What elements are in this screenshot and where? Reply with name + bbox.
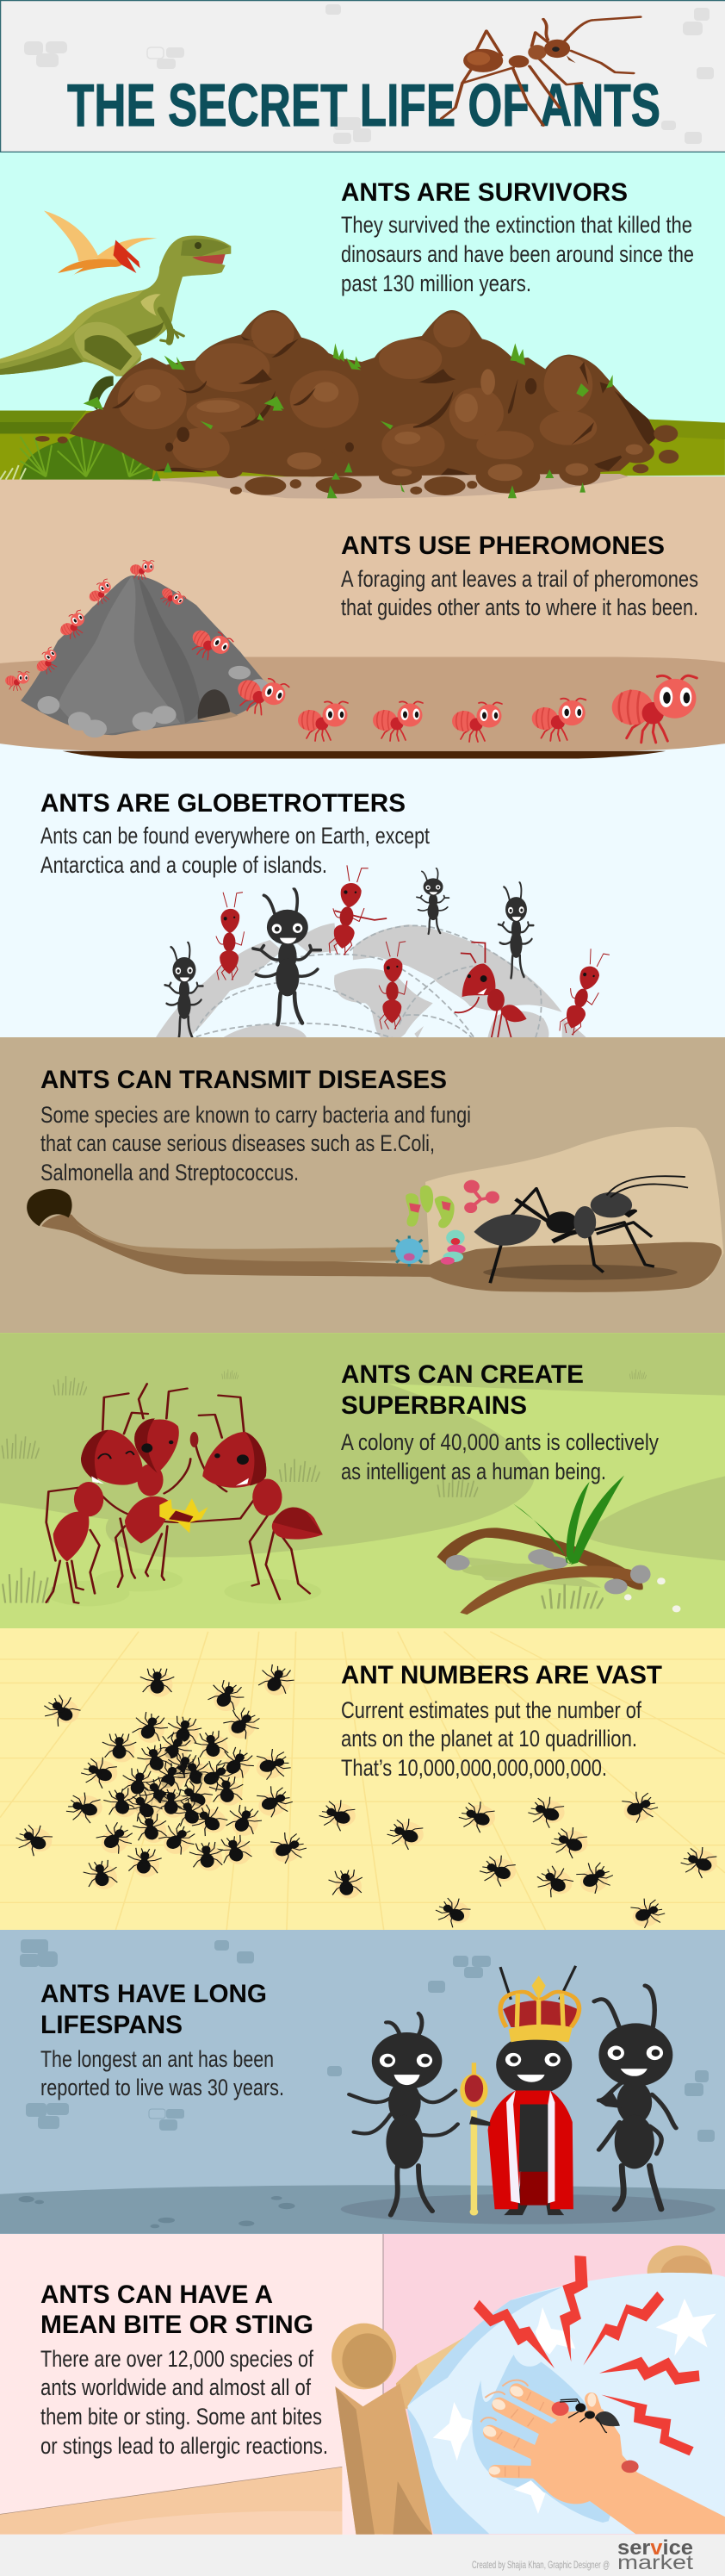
body text	[341, 1429, 659, 1484]
body text: or stings lead to allergic reactions.	[40, 2433, 328, 2459]
heading: ANTS CAN HAVE A	[40, 2280, 273, 2309]
logo: service market: market	[617, 2551, 694, 2573]
panel: ants use pheromones	[0, 476, 725, 758]
grey rock hill	[21, 576, 270, 737]
panel: ants can have a mean bite or sting	[0, 2234, 725, 2535]
body text: Some species are known to carry bacteria and fungi	[40, 1102, 471, 1128]
body text: as intelligent as a human being.	[341, 1459, 606, 1484]
icon: t-rex	[0, 236, 231, 411]
panel: ants can transmit diseases	[0, 1037, 725, 1333]
heading: ANTS CAN TRANSMIT DISEASES	[40, 1066, 447, 1094]
icon: ant mound	[69, 310, 657, 476]
panel: ants can create superbrains	[0, 1333, 725, 1629]
body text: Current estimates put the number of	[341, 1697, 641, 1723]
icon: brown ant on title	[442, 17, 641, 126]
icon: stick and grass	[437, 1475, 680, 1615]
icon: pain lightning bolts	[474, 2256, 700, 2455]
icon: bed with blanket	[396, 2245, 725, 2534]
icon: hand with bites	[480, 2380, 725, 2534]
body text: Antarctica and a couple of islands.	[40, 852, 327, 878]
icon: black ant	[474, 1176, 688, 1283]
body text: There are over 12,000 species of	[40, 2346, 313, 2372]
body text	[341, 212, 694, 296]
panel: ant numbers are vast	[0, 1628, 725, 1932]
body text	[40, 2346, 328, 2459]
footer	[0, 2535, 725, 2576]
red ants trail	[5, 561, 697, 743]
body text: that can cause serious diseases such as E.Coli,	[40, 1130, 435, 1156]
icon: bed post	[332, 2324, 432, 2535]
icon: pterosaur	[44, 211, 158, 277]
icon: three red ants	[46, 1384, 323, 1603]
heading: ANTS USE PHEROMONES	[341, 532, 665, 560]
body text: Ants can be found everywhere on Earth, except	[40, 823, 430, 849]
body text	[40, 2046, 284, 2100]
icon: ferns	[0, 431, 155, 480]
body text	[40, 1102, 471, 1185]
body text: That’s 10,000,000,000,000,000.	[341, 1755, 607, 1781]
icon: left ant	[349, 2013, 458, 2215]
body text: The longest an ant has been	[40, 2046, 274, 2072]
body text	[40, 823, 430, 878]
heading: ANTS ARE SURVIVORS	[341, 178, 628, 207]
body text: ants worldwide and almost all of	[40, 2374, 311, 2400]
tunnel and chamber	[27, 1127, 723, 1292]
icon: right ant	[594, 1986, 676, 2209]
panel: ants are globetrotters	[0, 741, 725, 1049]
heading: MEAN BITE OR STING	[40, 2311, 313, 2339]
ground	[0, 411, 725, 480]
ground	[0, 576, 725, 758]
heading: ANTS CAN CREATE	[341, 1360, 584, 1389]
heading: LIFESPANS	[40, 2011, 183, 2039]
heading: ANTS ARE GLOBETROTTERS	[40, 789, 406, 818]
landscape	[0, 1333, 725, 1606]
heading	[341, 1360, 584, 1420]
floor	[0, 2467, 342, 2535]
heading	[40, 2280, 313, 2339]
logo: service market	[617, 2536, 694, 2573]
heading: ANT NUMBERS ARE VAST	[341, 1661, 662, 1689]
swarm of ants	[11, 1663, 722, 1932]
floor	[0, 2185, 725, 2234]
icon: king ant with crown and scepter	[460, 1966, 579, 2216]
heading	[40, 1980, 267, 2039]
rocks below mound	[115, 425, 679, 499]
body text: A colony of 40,000 ants is collectively	[341, 1429, 659, 1455]
body text	[341, 1697, 641, 1781]
body text: them bite or sting. Some ant bites	[40, 2404, 322, 2430]
body text: past 130 million years.	[341, 271, 531, 296]
body text: ants on the planet at 10 quadrillion.	[341, 1726, 637, 1752]
heading: ANTS HAVE LONG	[40, 1980, 267, 2008]
body text: Salmonella and Streptococcus.	[40, 1160, 299, 1185]
icon: germs	[391, 1180, 499, 1266]
grass tufts	[2, 1369, 647, 1608]
logo: service market: service	[617, 2536, 693, 2560]
panel: ants are survivors	[0, 152, 725, 499]
panel: ants have long lifespans	[0, 1930, 725, 2234]
body text: reported to live was 30 years.	[40, 2075, 284, 2100]
body text	[341, 566, 698, 620]
ant characters on globe	[164, 864, 610, 1049]
globe illustration	[148, 923, 598, 1049]
heading: SUPERBRAINS	[341, 1391, 527, 1420]
credit line: Created by Shajia Khan, Graphic Designer @	[472, 2559, 610, 2571]
panel: header	[0, 0, 725, 152]
